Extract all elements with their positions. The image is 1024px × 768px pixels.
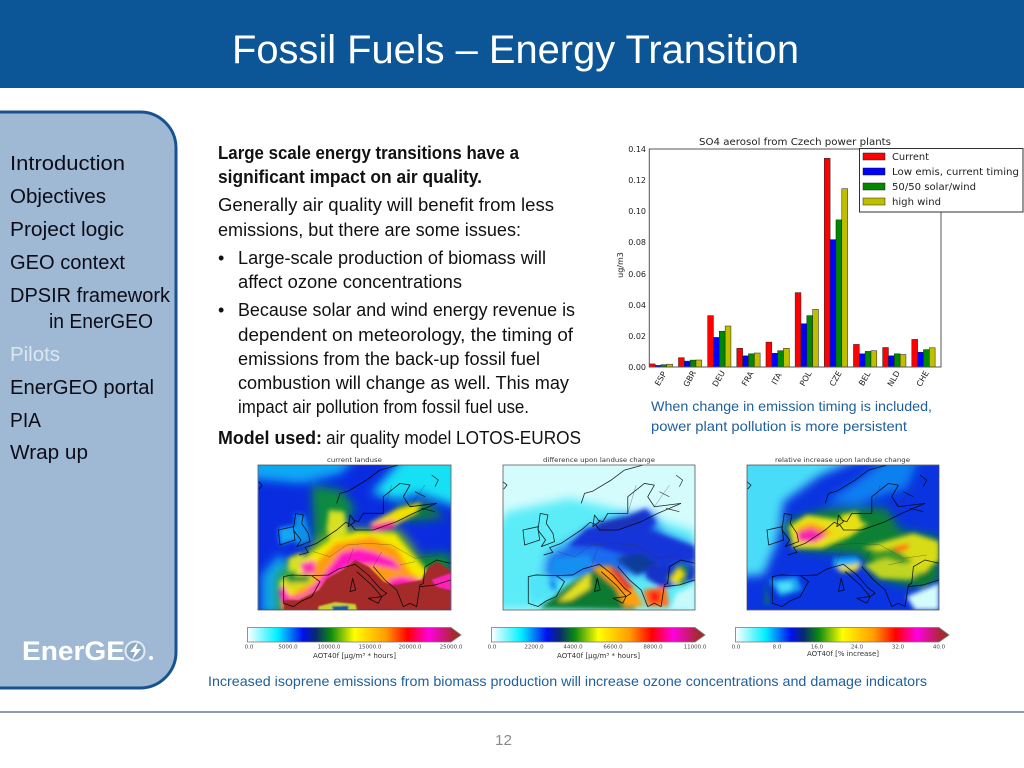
x axis labels: BEL	[857, 370, 873, 387]
y axis labels: 0.14	[628, 145, 646, 154]
panel: navigation sidebar: in EnerGEO	[49, 311, 153, 333]
y axis labels: 0.10	[628, 207, 646, 216]
y axis labels: 0.04	[628, 301, 646, 310]
panel: navigation sidebar: EnerGEO portal	[10, 377, 154, 399]
text block: main body: air quality model LOTOS-EUROS	[326, 428, 581, 448]
panel: navigation sidebar: Pilots	[10, 344, 60, 366]
title: Fossil Fuels – Energy Transition	[232, 28, 799, 72]
text block: main body: emissions, but there are some issues:	[218, 220, 521, 240]
colour bar: relative increase: 24.0	[851, 644, 864, 650]
colour bar: difference: AOT40f [µg/m³ * hours]	[557, 652, 640, 660]
x axis labels: DEU	[711, 369, 727, 388]
colour bar: current landuse	[245, 628, 463, 660]
colour bar: current landuse: AOT40f [µg/m³ * hours]	[313, 652, 396, 660]
x axis labels: NLD	[886, 369, 902, 388]
map panel: relative increase upon landuse change	[737, 455, 939, 610]
y axis labels: 0.00	[628, 363, 646, 372]
map panel: current landuse: current landuse	[327, 456, 382, 464]
panel: navigation sidebar: Project logic	[10, 219, 124, 241]
bar chart: SO4 aerosol	[616, 137, 1023, 388]
x axis labels: POL	[798, 369, 814, 388]
colour bar: difference: 0.0	[488, 644, 497, 650]
text block: main body	[218, 143, 581, 448]
header band	[0, 0, 1024, 88]
panel: navigation sidebar: DPSIR framework	[10, 285, 171, 307]
colour bar: difference: 2200.0	[524, 644, 544, 650]
chart caption	[651, 398, 932, 434]
panel: navigation sidebar: Introduction	[10, 153, 125, 175]
colour bar: relative increase	[732, 628, 949, 658]
text block: main body: impact air pollution from fossil fuel use.	[238, 397, 529, 417]
colour bar: relative increase: AOT40f [% increase]	[807, 650, 879, 658]
x axis labels: GBR	[682, 369, 698, 388]
colour bar: current landuse: 10000.0	[318, 644, 341, 650]
colour bar: current landuse: 15000.0	[359, 644, 382, 650]
x axis labels: CHE	[915, 369, 931, 388]
y axis labels: 0.08	[628, 238, 646, 247]
panel: navigation sidebar: GEO context	[10, 252, 125, 274]
colour bar: current landuse: 20000.0	[399, 644, 422, 650]
chart caption: power plant pollution is more persistent	[651, 418, 907, 434]
colour bar: difference: 11000.0	[684, 644, 707, 650]
legend: Current	[892, 152, 929, 163]
colour bar: difference: 8800.0	[643, 644, 663, 650]
text block: main body: Model used:	[218, 428, 322, 448]
x axis labels: CZE	[828, 370, 844, 388]
panel: navigation sidebar	[0, 112, 176, 688]
text block: main body: •	[218, 300, 224, 320]
chart caption: When change in emission timing is included,	[651, 398, 932, 414]
x axis labels: ITA	[770, 371, 784, 386]
text block: main body: Because solar and wind energy revenue is	[238, 300, 575, 320]
text block: main body: significant impact on air quality.	[218, 167, 482, 187]
map panel: difference upon landuse change: difference upon landuse change	[543, 456, 655, 464]
colour bar: current landuse: 25000.0	[440, 644, 463, 650]
x axis labels: ESP	[653, 370, 669, 387]
text block: main body: Large-scale production of biomass will	[238, 248, 546, 268]
y axis labels: 0.06	[628, 270, 646, 279]
text block: main body: •	[218, 248, 224, 268]
text block: main body: Generally air quality will benefit from less	[218, 195, 554, 215]
y axis labels: 0.12	[628, 176, 646, 185]
bars	[649, 158, 935, 367]
text block: main body: affect ozone concentrations	[238, 272, 462, 292]
x axis labels	[653, 369, 931, 388]
legend	[860, 148, 1023, 212]
map panel: current landuse	[258, 457, 452, 610]
panel: navigation sidebar: PIA	[10, 410, 42, 432]
text block: main body: combustion will change as well. This may	[238, 373, 569, 393]
colour bar: relative increase: 8.0	[773, 644, 782, 650]
maps caption: Increased isoprene emissions from biomass production will increase ozone concentrations and damage indicators	[208, 673, 927, 689]
y axis labels	[628, 145, 646, 372]
y axis labels: 0.02	[628, 332, 646, 341]
colour bar: current landuse: 0.0	[245, 644, 254, 650]
legend: 50/50 solar/wind	[892, 182, 976, 193]
text block: main body: dependent on meteorology, the timing of	[238, 325, 574, 345]
axes frame	[649, 149, 941, 367]
colour bar: difference: 6600.0	[603, 644, 623, 650]
page number: 12	[495, 732, 512, 749]
map panel: difference upon landuse change	[493, 456, 695, 610]
colour bar: relative increase: 16.0	[811, 644, 824, 650]
colour bar: difference: 4400.0	[563, 644, 583, 650]
colour bar: current landuse: 5000.0	[278, 644, 298, 650]
y axis title: ug/m3	[616, 252, 625, 278]
logo: EnerGEO: EnerGE	[22, 636, 125, 666]
colour bar: relative increase: 40.0	[933, 644, 946, 650]
legend: high wind	[892, 197, 941, 208]
panel: navigation sidebar: Objectives	[10, 186, 106, 208]
x axis labels: FRA	[740, 369, 756, 388]
legend: Low emis, current timing	[892, 167, 1019, 178]
map panel: relative increase upon landuse change: relative increase upon landuse change	[775, 456, 910, 464]
text block: main body: Large scale energy transitions have a	[218, 143, 520, 163]
colour bar: relative increase: 0.0	[732, 644, 741, 650]
colour bar: difference	[488, 628, 707, 660]
chart title: SO4 aerosol from Czech power plants	[699, 137, 891, 148]
colour bar: relative increase: 32.0	[892, 644, 905, 650]
panel: navigation sidebar: Wrap up	[10, 442, 88, 464]
text block: main body: emissions from the back-up fossil fuel	[238, 349, 540, 369]
